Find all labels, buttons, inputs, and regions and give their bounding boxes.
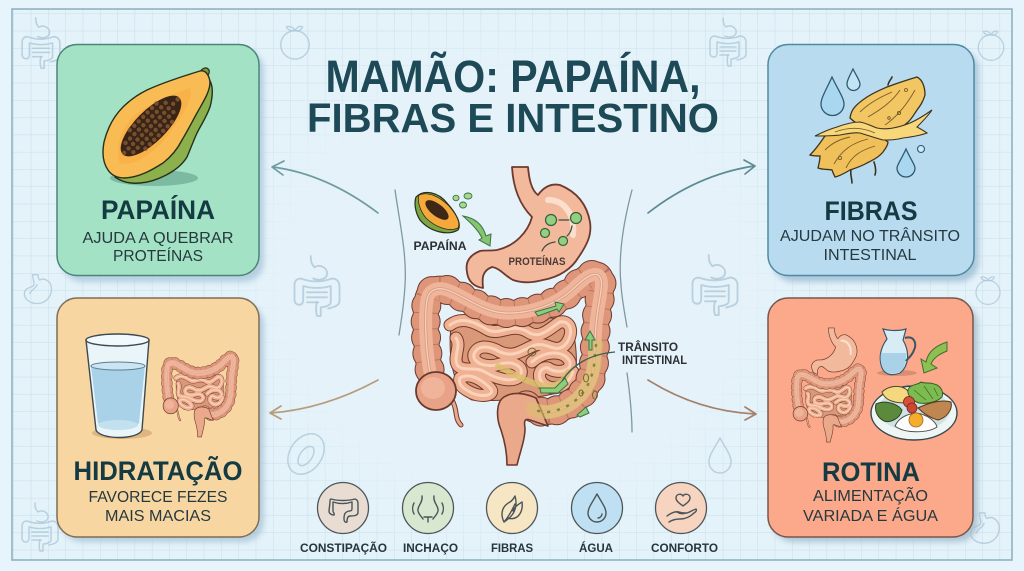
panel: papaína: AJUDA A QUEBRAR (82, 230, 234, 247)
label: trânsito intestinal with leader: TRÂNSITO (618, 341, 678, 354)
panel: rotina: VARIADA E ÁGUA (803, 506, 938, 525)
panel: papaína: PROTEÍNAS (113, 246, 203, 265)
title: FIBRAS E INTESTINO (307, 95, 719, 141)
arrow: papaya to stomach (463, 216, 491, 246)
icon row: inchaço: INCHAÇO (403, 541, 458, 555)
icon row: conforto (651, 482, 718, 555)
body silhouette lines (395, 190, 632, 432)
central digestive system illustration (416, 167, 601, 465)
icon row: água (572, 482, 622, 555)
arrow: to papaína (272, 161, 378, 213)
green transit arrows (535, 302, 595, 417)
panel: rotina: ROTINA (822, 457, 920, 487)
arrow: to fibras (648, 160, 755, 213)
label: trânsito intestinal with leader: INTESTINAL (622, 355, 687, 367)
contents dots (533, 345, 596, 412)
arrow: to hidratação (270, 380, 378, 419)
title (307, 51, 719, 141)
small papaya with enzyme dots (415, 192, 472, 233)
icon: digestive system (793, 328, 861, 442)
panel: fibras (768, 44, 979, 282)
panel: rotina (768, 298, 978, 542)
icon: water jug (877, 329, 917, 376)
title: MAMÃO: PAPAÍNA, (326, 51, 700, 102)
label: proteínas: PROTEÍNAS (508, 255, 566, 268)
icon row: inchaço (402, 482, 458, 555)
label: trânsito intestinal with leader (562, 341, 687, 381)
intestines (416, 274, 601, 465)
fibre contents in descending colon (533, 345, 596, 412)
icon: glass of water (86, 334, 152, 439)
panel: papaína (57, 44, 264, 282)
panel: rotina: ALIMENTAÇÃO (813, 485, 928, 505)
panel: hidratação: FAVORECE FEZES (88, 489, 228, 506)
stool rings (528, 348, 598, 399)
icon row: fibras (486, 482, 538, 555)
panel: fibras: INTESTINAL (824, 247, 917, 264)
label: papaína: PAPAÍNA (414, 240, 466, 253)
seeds (112, 87, 190, 165)
icon: fibres and water drops (810, 69, 932, 183)
icon row: constipação (300, 482, 387, 555)
icon: papaya half (103, 68, 212, 186)
arrow: to rotina (648, 380, 756, 420)
proteins in stomach (540, 212, 582, 246)
panel: fibras: AJUDAM NO TRÂNSITO (780, 226, 960, 245)
panel: hidratação: MAIS MACIAS (105, 508, 211, 525)
protein arrows (542, 220, 572, 251)
icon row: conforto: CONFORTO (651, 541, 718, 555)
panel: hidratação (57, 298, 264, 542)
icon row: fibras: FIBRAS (491, 541, 533, 555)
panel: hidratação: HIDRATAÇÃO (74, 455, 242, 486)
icon: plate of food (871, 382, 957, 440)
icon row: água: ÁGUA (579, 540, 613, 555)
panel: papaína: PAPAÍNA (101, 194, 215, 225)
contents in small intestine (498, 366, 568, 386)
icon row: constipação: CONSTIPAÇÃO (300, 540, 387, 555)
panel: fibras: FIBRAS (824, 196, 918, 226)
icon: intestines (163, 357, 234, 437)
icon: green arrow (921, 342, 947, 373)
stomach (467, 167, 590, 288)
